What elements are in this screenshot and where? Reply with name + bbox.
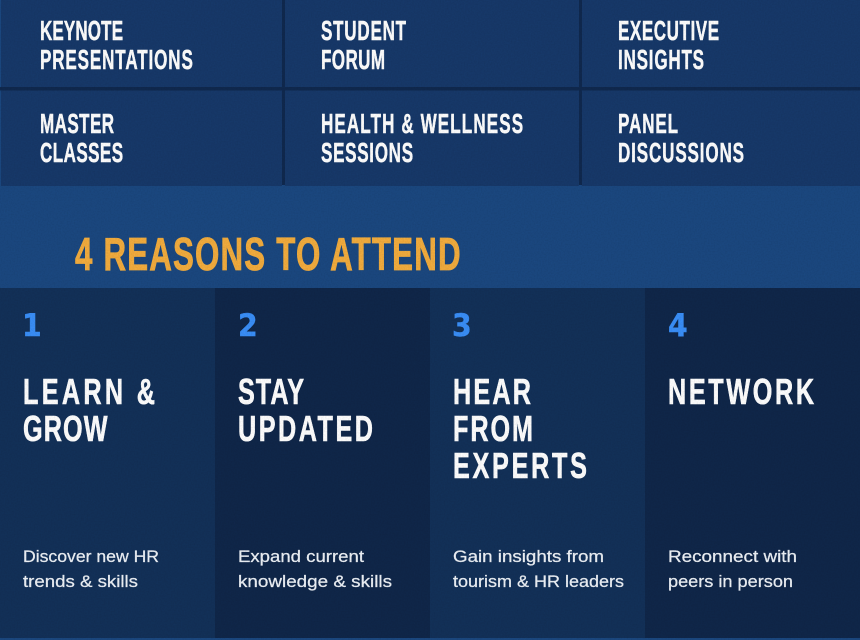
cell: panel discussions: PANEL	[618, 108, 678, 139]
reason 2: stay updated: UPDATED	[238, 409, 373, 449]
reason 3: hear from experts	[430, 288, 645, 638]
cell: executive insights: INSIGHTS	[618, 44, 704, 75]
reason 1: learn and grow: LEARN &	[23, 372, 155, 412]
panel: reasons columns	[0, 288, 860, 638]
reason 3: hear from experts: HEAR	[453, 372, 531, 412]
panel: session types grid	[0, 0, 860, 186]
reason 3: hear from experts: FROM	[453, 409, 533, 449]
reason 1: learn and grow: trends & skills	[23, 573, 138, 591]
reason 4: network: 4	[668, 308, 688, 344]
cell: master classes	[1, 90, 282, 186]
cell: health and wellness sessions	[285, 90, 579, 186]
reason 4: network: NETWORK	[668, 372, 814, 412]
reason 1: learn and grow	[0, 288, 215, 638]
reason 4: network: peers in person	[668, 573, 793, 591]
reason 4: network: Reconnect with	[668, 548, 797, 566]
reason 3: hear from experts: 3	[452, 308, 472, 344]
cell: keynote presentations	[1, 0, 282, 87]
cell: student forum: FORUM	[321, 44, 385, 75]
cell: health and wellness sessions: SESSIONS	[321, 137, 413, 168]
cell: master classes: MASTER	[40, 108, 114, 139]
reason 3: hear from experts: Gain insights from	[453, 548, 604, 566]
reason 2: stay updated: 2	[238, 308, 258, 344]
cell: health and wellness sessions: HEALTH & WELLNESS	[321, 108, 523, 139]
reason 3: hear from experts: EXPERTS	[453, 446, 587, 486]
cell: executive insights: EXECUTIVE	[618, 15, 719, 46]
cell: panel discussions: DISCUSSIONS	[618, 137, 744, 168]
reason 2: stay updated	[215, 288, 430, 638]
reason 3: hear from experts: tourism & HR leaders	[453, 573, 624, 591]
heading: 4 reasons to attend	[0, 186, 860, 288]
reason 1: learn and grow: GROW	[23, 409, 108, 449]
cell: student forum	[285, 0, 579, 87]
reason 2: stay updated: Expand current	[238, 548, 364, 566]
reason 2: stay updated: knowledge & skills	[238, 573, 392, 591]
reason 1: learn and grow: Discover new HR	[23, 548, 159, 566]
cell: student forum: STUDENT	[321, 15, 406, 46]
cell: master classes: CLASSES	[40, 137, 123, 168]
cell: keynote presentations: PRESENTATIONS	[40, 44, 193, 75]
reason 1: learn and grow: 1	[22, 308, 42, 344]
cell: executive insights	[582, 0, 860, 87]
cell: panel discussions	[582, 90, 860, 186]
reason 4: network	[645, 288, 860, 638]
heading: 4 reasons to attend: 4 REASONS TO ATTEND	[75, 229, 461, 281]
reason 2: stay updated: STAY	[238, 372, 304, 412]
cell: keynote presentations: KEYNOTE	[40, 15, 123, 46]
